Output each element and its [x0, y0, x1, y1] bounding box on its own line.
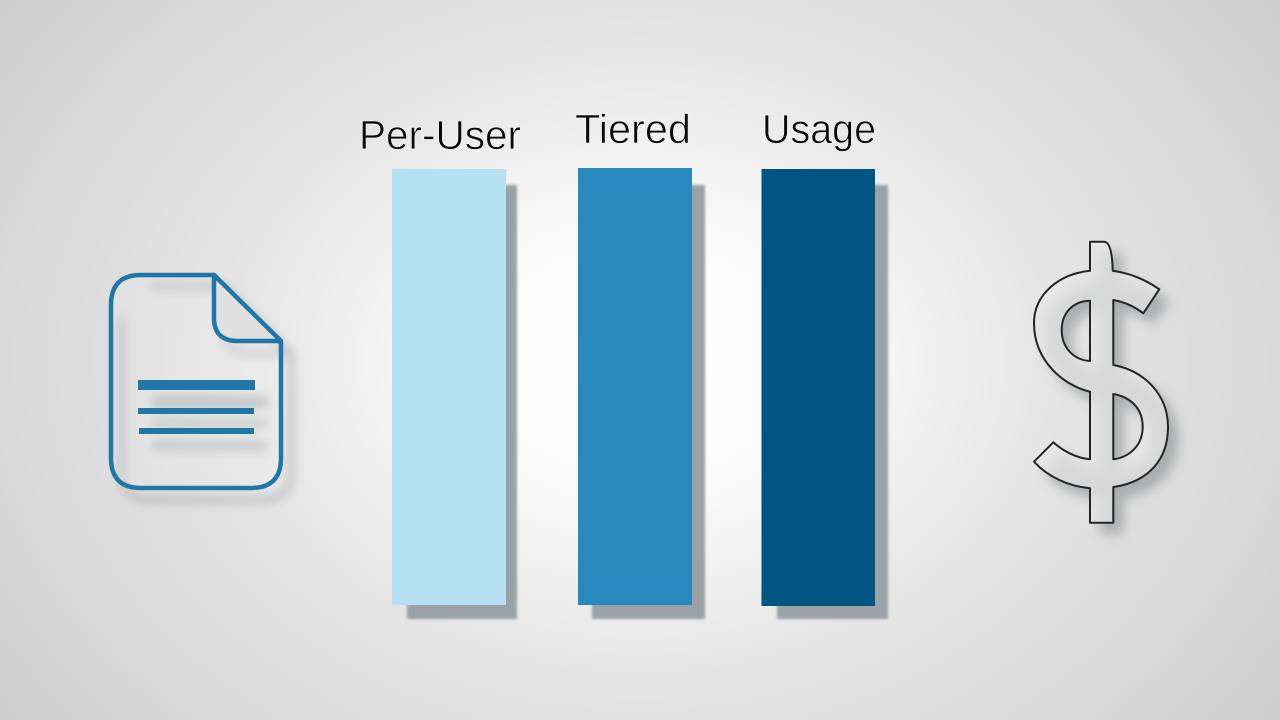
label: Tiered: Tiered: [575, 106, 691, 152]
bar chart: pricing models: [392, 168, 888, 619]
icon: dollar sign: [1034, 242, 1178, 534]
bar: Tiered: [578, 168, 705, 619]
bar: Per-User: [392, 169, 517, 619]
label: Per-User: Per-User: [359, 112, 521, 158]
label: Usage: Usage: [762, 106, 876, 152]
bar: Usage: [762, 169, 888, 619]
icon: document: [111, 275, 291, 500]
